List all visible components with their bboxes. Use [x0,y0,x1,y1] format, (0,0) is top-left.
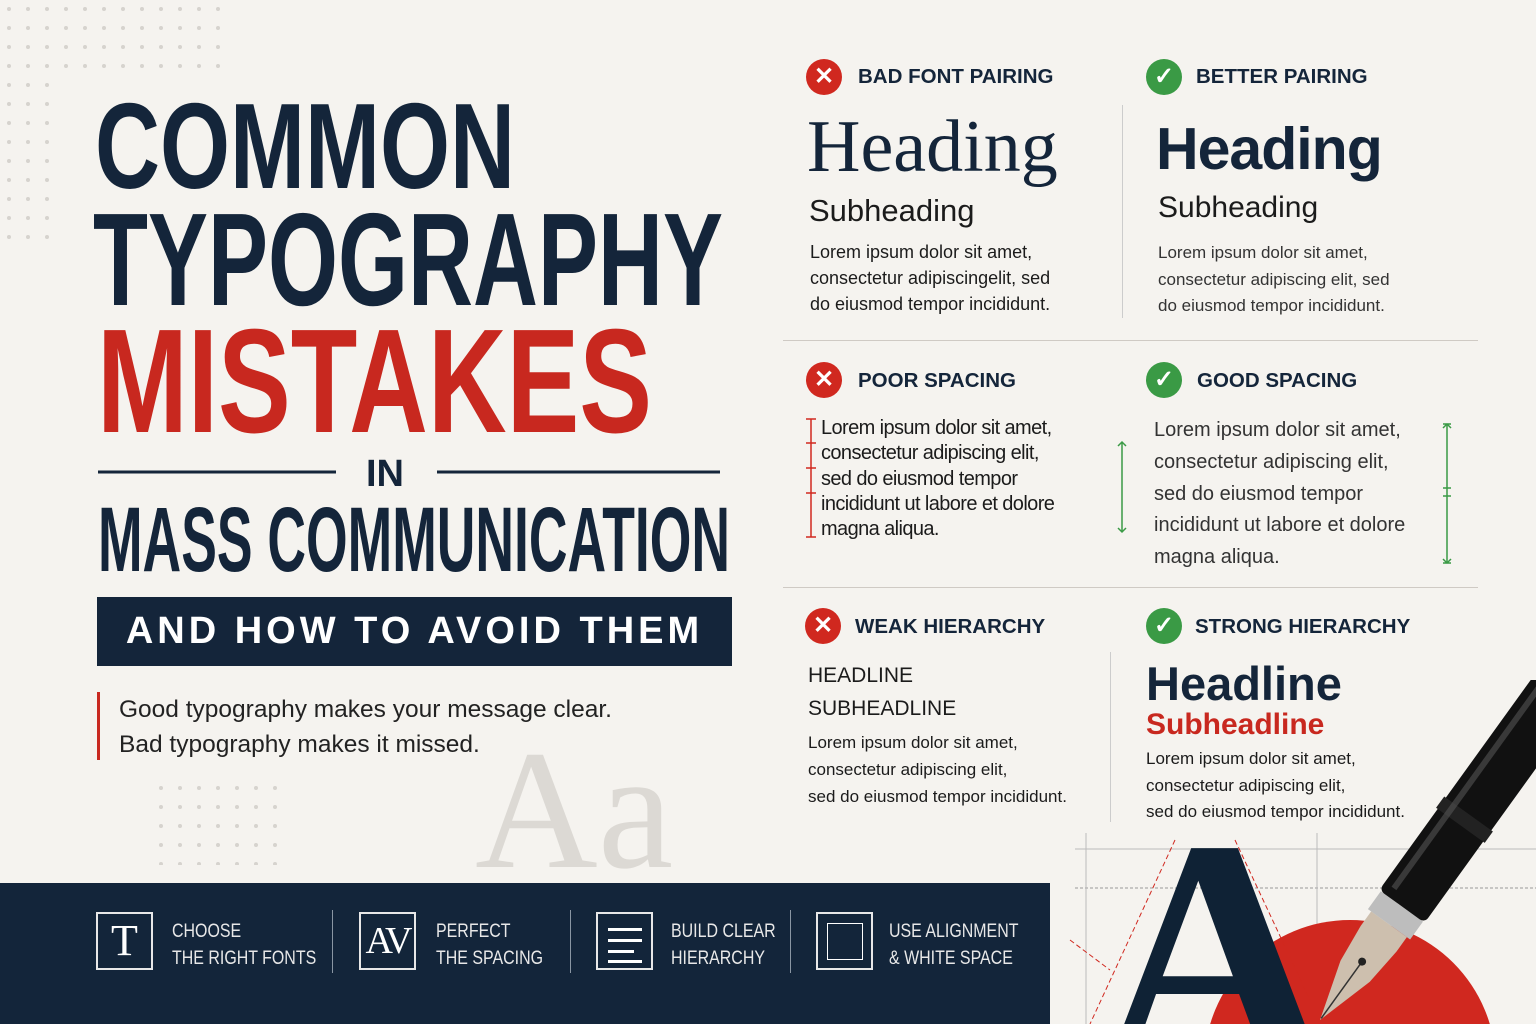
panel: spacing: Lorem ipsum dolor sit amet, [821,417,1052,439]
panel: hierarchy: sed do eiusmod tempor incididunt. [1146,802,1405,821]
panel: font pairing: do eiusmod tempor incididunt. [810,294,1050,314]
tip: fonts: CHOOSE [172,921,241,942]
tagline: Good typography makes your message clear. [119,696,612,723]
tip: spacing: THE SPACING [436,948,543,969]
icon: good: ✓ [1154,366,1174,393]
tagline [97,692,612,760]
illustration: letter A with pen [1070,680,1536,1024]
panel: spacing: sed do eiusmod tempor [821,468,1017,490]
icon: bad: ✕ [814,366,834,393]
panel: font pairing: BAD FONT PAIRING [858,65,1054,88]
panel: font pairing: Lorem ipsum dolor sit amet, [810,242,1032,262]
tip: alignment: & WHITE SPACE [889,948,1013,969]
title: IN [366,453,404,495]
decorative dot grid [7,7,277,865]
panel: spacing: magna aliqua. [1154,546,1280,568]
panel: spacing: incididunt ut labore et dolore [1154,514,1405,536]
icon: fountain pen [1296,564,1536,1024]
tip: alignment [816,912,1018,970]
tip: fonts: T [111,916,138,965]
panel: font pairing: Heading [1156,116,1382,182]
panel: hierarchy: Subheadline [1146,708,1324,741]
panel: font pairing: Subheading [809,193,974,228]
panel: hierarchy [805,608,1410,822]
panel: font pairing [806,59,1390,318]
icon: bad [806,362,842,398]
icon: good [1146,608,1182,644]
panel: font pairing: Subheading [1158,191,1318,224]
panel: hierarchy: STRONG HIERARCHY [1195,615,1410,638]
tip: fonts: THE RIGHT FONTS [172,948,316,969]
panel: spacing: consectetur adipiscing elit, [1154,451,1389,473]
bottom bar [0,883,1050,1024]
icon: good [1146,362,1182,398]
panel: font pairing: consectetur adipiscing elit, sed [1158,270,1390,288]
panel: spacing: incididunt ut labore et dolore [821,493,1054,515]
panel: spacing: Lorem ipsum dolor sit amet, [1154,419,1401,441]
panel: font pairing: BETTER PAIRING [1196,65,1368,88]
panel: hierarchy: WEAK HIERARCHY [855,615,1045,638]
icon: good [1146,59,1182,95]
tip: fonts [96,912,316,970]
tip: hierarchy: BUILD CLEAR [671,921,776,942]
panel: font pairing: consectetur adipiscingelit, sed [810,268,1050,288]
icon: good: ✓ [1154,63,1174,90]
subtitle banner [97,597,732,666]
icon: good: ✓ [1154,612,1174,639]
icon: bad [806,59,842,95]
panel: hierarchy: SUBHEADLINE [808,697,956,720]
panel: spacing: POOR SPACING [858,369,1016,392]
subtitle banner: AND HOW TO AVOID THEM [126,610,703,652]
panel: hierarchy: consectetur adipiscing elit, [808,760,1007,779]
panel: hierarchy: HEADLINE [808,664,913,687]
tip: hierarchy [596,912,776,970]
panel: hierarchy: Headline [1146,657,1342,710]
tip: spacing [359,912,543,970]
icon: bad: ✕ [814,63,834,90]
panel: spacing: consectetur adipiscing elit, [821,442,1039,464]
title [93,80,730,591]
title: COMMON [95,80,515,214]
panel: spacing: sed do eiusmod tempor [1154,483,1363,505]
panel: spacing: magna aliqua. [821,518,939,540]
tip: spacing: AV [366,920,410,962]
tagline: Bad typography makes it missed. [119,731,480,758]
panel: hierarchy: sed do eiusmod tempor incididunt. [808,787,1067,806]
panel: hierarchy: Lorem ipsum dolor sit amet, [808,733,1018,752]
icon: bad [805,608,841,644]
panel: spacing: GOOD SPACING [1197,369,1357,392]
panel: hierarchy: consectetur adipiscing elit, [1146,776,1345,794]
decorative Aa: Aa [475,716,673,904]
icon: bad: ✕ [813,612,833,639]
panel: font pairing: Heading [807,106,1058,188]
panel: font pairing: Lorem ipsum dolor sit amet, [1158,243,1368,262]
tip: alignment: USE ALIGNMENT [889,921,1018,942]
panel: spacing [806,362,1452,568]
tip: hierarchy: HIERARCHY [671,948,765,969]
panel: hierarchy: Lorem ipsum dolor sit amet, [1146,749,1356,768]
tip: spacing: PERFECT [436,921,510,942]
panel: font pairing: do eiusmod tempor incididunt. [1158,296,1385,315]
